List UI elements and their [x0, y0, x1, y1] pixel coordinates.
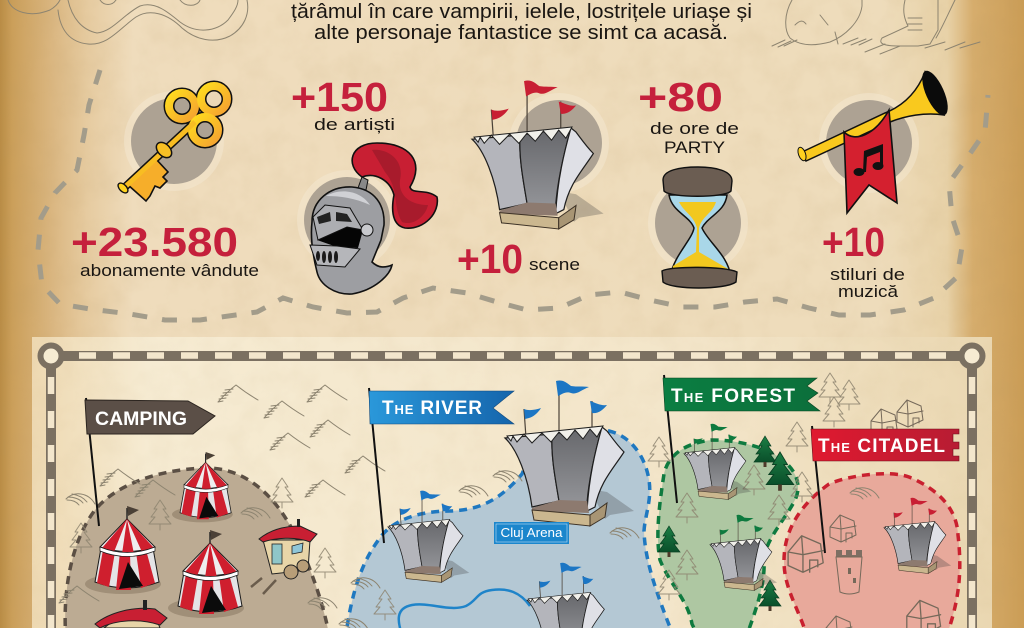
map sketches: outline trees [70, 373, 860, 620]
flag: camping: CAMPING [95, 409, 187, 430]
flag: the river [369, 388, 514, 543]
stat: artists: +150 [291, 74, 388, 120]
zone: the citadel area [784, 474, 960, 628]
stat: stages [457, 236, 580, 282]
stat: artists [291, 74, 395, 134]
map sketches: mountains [59, 385, 385, 603]
map frame rail [40, 346, 982, 628]
icon: key [116, 86, 227, 201]
castles [388, 380, 951, 628]
river line [399, 590, 530, 628]
stat: party hours: PARTY [664, 138, 725, 157]
flag: the forest: THE FOREST [671, 386, 795, 407]
icon: hourglass [648, 167, 748, 288]
zone: the forest area [658, 440, 798, 628]
flag: the citadel: THE CITADEL [818, 436, 945, 457]
label: Cluj Arena [494, 522, 569, 544]
stat: music styles: +10 [822, 219, 885, 265]
stat: music styles: stiluri de [830, 265, 905, 284]
sketch: sea serpent [8, 0, 248, 44]
stat: music styles: muzică [838, 282, 899, 301]
dark green trees [658, 436, 794, 611]
flag: the river: THE RIVER [382, 398, 482, 419]
icon: trumpet with banner [796, 67, 953, 213]
icon: citadel tower sketch [836, 550, 862, 594]
stat: stages: scene [529, 255, 580, 274]
flag: the forest [663, 375, 820, 503]
stat: party hours: +80 [638, 74, 723, 120]
stat: subscriptions sold [71, 219, 259, 280]
intro text: țărâmul în care vampirii, ielele, lostrițele uriașe și [291, 1, 752, 23]
icon: knight helmet [297, 143, 437, 294]
flag: camping [85, 398, 215, 526]
circus tents [85, 452, 244, 618]
stat: subscriptions sold: +23.580 [71, 219, 238, 265]
icon: lower wagon [95, 600, 167, 628]
zone: the river area [345, 431, 675, 628]
stat: party hours [638, 74, 739, 157]
stat: party hours: de ore de [650, 119, 739, 138]
stat: stages: +10 [457, 236, 523, 282]
panel: festival map [32, 337, 992, 628]
stat: subscriptions sold: abonamente vândute [80, 261, 259, 280]
intro text [291, 1, 752, 44]
map sketches: hills [66, 471, 879, 628]
icon: castle stage [472, 81, 609, 229]
label: Cluj Arena: Cluj Arena [500, 526, 563, 540]
stat: music styles [822, 219, 905, 301]
intro text: alte personaje fantastice se simt ca acasă. [314, 22, 728, 44]
stat: artists: de artiști [314, 115, 395, 134]
sketch: monsters [772, 0, 980, 54]
zone: camping area [65, 468, 330, 628]
map sketches: houses [788, 400, 941, 628]
icon: wagon [251, 519, 317, 594]
flag: the citadel [811, 426, 959, 553]
dashed trail around statistics [38, 70, 988, 320]
